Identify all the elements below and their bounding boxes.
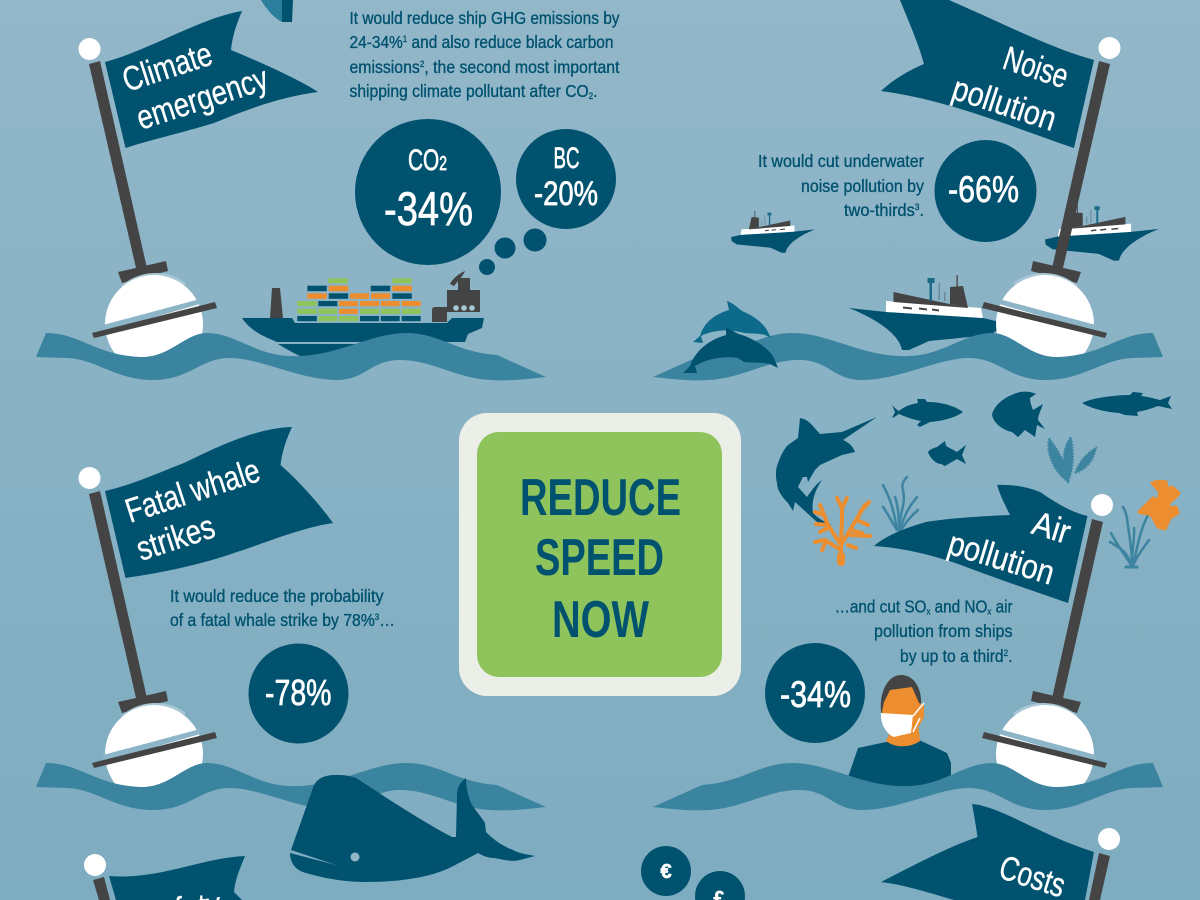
wave <box>36 763 546 810</box>
text: climate emergency description: emissions <box>350 57 427 77</box>
bubble: CO2 -34% <box>355 119 501 265</box>
coin: pound <box>695 871 745 900</box>
bubble: BC -20% <box>516 129 616 229</box>
bubble: -66% <box>934 140 1036 242</box>
bubble: -78% <box>248 644 348 744</box>
icon: partial fish at top edge <box>261 0 293 22</box>
panel: noise pollution <box>653 0 1163 380</box>
icon: container ship <box>242 271 484 360</box>
text: noise description: 3 <box>915 202 919 212</box>
text: air pollution description: pollution from ships <box>874 621 1013 641</box>
flag: climate emergency <box>105 11 318 148</box>
text: whale description <box>170 586 395 630</box>
text: climate emergency description <box>350 8 620 101</box>
flag: climate emergency: Climate <box>118 35 217 100</box>
bubble: -34% <box>765 643 865 743</box>
icon: orange sponge <box>1139 481 1179 529</box>
text: air pollution description: . <box>1008 646 1012 666</box>
text: noise description: It would cut underwater <box>758 151 924 171</box>
flag pole and ball <box>78 38 146 268</box>
icon: ship behind pole <box>1045 204 1159 261</box>
heading <box>520 469 681 649</box>
flag: air pollution: pollution <box>944 524 1059 593</box>
icon: long fish <box>1082 392 1172 416</box>
flag: costs <box>881 804 1094 900</box>
text: air pollution description: x <box>926 607 931 617</box>
flag: fatal whale strikes <box>105 427 333 578</box>
buoy <box>982 691 1107 803</box>
flag pole and ball <box>84 854 110 900</box>
flag pole and ball <box>78 467 146 698</box>
bubble: BC -20%: -20% <box>534 175 598 213</box>
text: climate emergency description: 2 <box>589 91 593 101</box>
coin: euro <box>641 846 691 896</box>
bubble: BC -20%: BC <box>554 142 580 175</box>
icon: angelfish <box>992 392 1045 437</box>
wave <box>653 763 1163 810</box>
icon: swordfish <box>776 417 877 525</box>
text: climate emergency description: 1 <box>403 34 407 44</box>
icon: seaweed left <box>883 477 918 530</box>
flag pole and ball <box>1052 494 1113 698</box>
buoy <box>982 261 1107 373</box>
flag: safety <box>109 856 245 900</box>
text: climate emergency description: , the second most important <box>424 57 620 77</box>
panel: reduce speed now <box>459 413 741 696</box>
panel: fatal whale strikes <box>36 427 546 882</box>
text: whale description: … <box>379 610 395 630</box>
text: noise description: . <box>919 200 924 220</box>
buoy <box>92 261 217 373</box>
outer frame <box>459 413 741 696</box>
icon: dolphins <box>683 301 778 373</box>
heading: REDUCE <box>520 469 681 527</box>
heading: SPEED <box>535 529 664 587</box>
icon: small fish <box>928 441 966 466</box>
text: air pollution description: and NO <box>930 597 987 617</box>
text: climate emergency description: 2 <box>420 59 424 69</box>
text: climate emergency description: It would reduce ship GHG emissions by <box>350 8 620 28</box>
bubble: CO2 -34%: -34% <box>384 182 473 235</box>
flag: noise pollution <box>881 0 1094 148</box>
text: whale description: of a fatal whale strike by 78% <box>170 610 398 630</box>
text: climate emergency description: shipping climate pollutant after CO <box>350 81 617 101</box>
bubble: CO2 -34%: CO2 <box>408 144 447 177</box>
text: air pollution description: 2 <box>1004 648 1008 658</box>
inner box <box>477 432 722 677</box>
icon: fish <box>892 399 963 427</box>
text: whale description: It would reduce the probability <box>170 586 384 606</box>
text: noise description: two-thirds <box>844 200 920 220</box>
text: air pollution description <box>835 597 1013 666</box>
panel: air pollution <box>653 392 1179 810</box>
icon: small ship left <box>731 211 815 253</box>
panel: costs <box>641 804 1120 900</box>
panel: climate emergency <box>36 8 620 380</box>
text: climate emergency description: 24-34% <box>350 32 410 52</box>
flag: air pollution <box>874 485 1088 603</box>
icon: large ship <box>849 275 1000 350</box>
text: climate emergency description: . <box>593 81 598 101</box>
icon: whale <box>290 775 535 882</box>
icon: coral <box>815 498 870 562</box>
text: air pollution description: …and cut SO <box>835 597 940 617</box>
panel: safety <box>84 854 245 900</box>
icon: person with mask <box>847 675 951 788</box>
wave <box>653 333 1163 380</box>
text: air pollution description: air <box>991 597 1013 617</box>
icon: seaweed right <box>1110 507 1149 567</box>
flag: fatal whale strikes: Fatal whale <box>121 452 265 531</box>
flag: air pollution: Air <box>1028 504 1075 552</box>
text: noise description <box>758 151 924 220</box>
flag: climate emergency: emergency <box>132 59 273 138</box>
text: whale description: 3 <box>375 612 379 622</box>
flag: noise pollution: pollution <box>948 69 1061 139</box>
icon: kelp <box>1048 437 1096 482</box>
bubble: -34%: -34% <box>780 674 851 715</box>
text: air pollution description: x <box>987 607 992 617</box>
flag: noise pollution: Noise <box>999 39 1073 96</box>
text: noise description: noise pollution by <box>801 176 924 196</box>
wave <box>36 333 546 380</box>
text: air pollution description: by up to a third <box>900 646 1016 666</box>
text: climate emergency description: and also reduce black carbon <box>407 32 614 52</box>
flag: fatal whale strikes: strikes <box>132 508 220 569</box>
coin: euro: € <box>660 861 672 883</box>
flag pole and ball <box>1089 828 1120 900</box>
buoy <box>92 691 217 803</box>
bubble: -66%: -66% <box>948 169 1019 210</box>
bubble: -78%: -78% <box>265 672 332 713</box>
smoke bubbles <box>479 228 546 275</box>
heading: NOW <box>552 591 650 649</box>
flag pole and ball <box>1052 37 1120 268</box>
